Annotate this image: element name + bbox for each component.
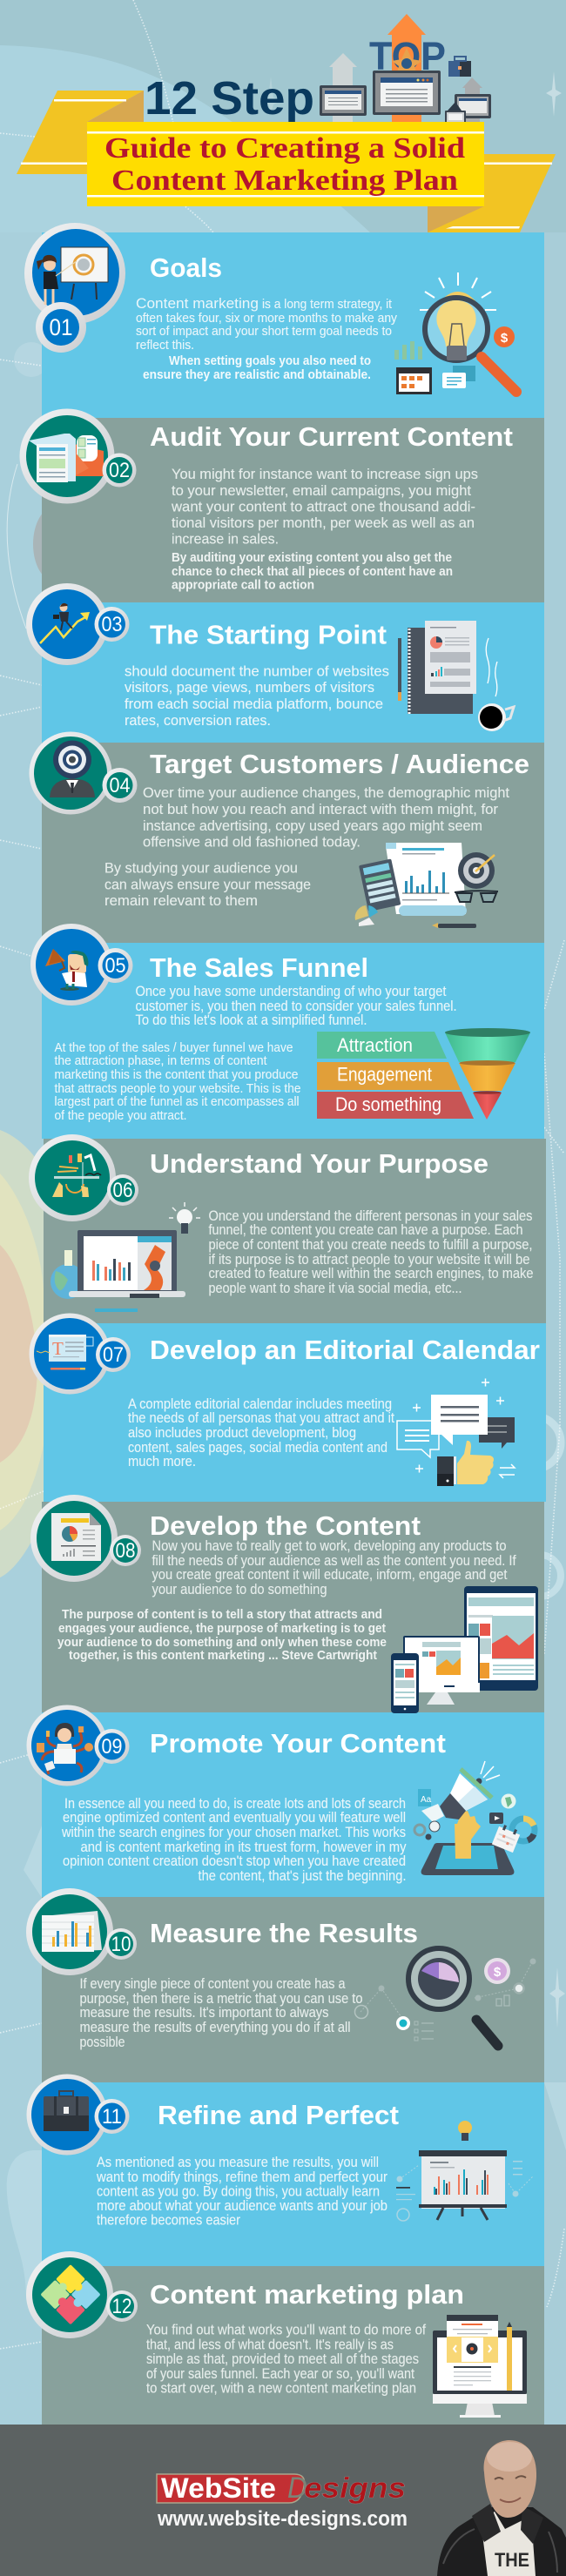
number 03: 03 (101, 613, 122, 636)
body text (104, 785, 509, 909)
number 12: 12 (111, 2295, 132, 2318)
heading: The Sales Funnel (150, 952, 368, 983)
icon: monitor with web page (433, 2315, 527, 2418)
body text: you create great content it will educate, inform, engage and get (152, 1567, 508, 1583)
body text: increase in sales. (172, 531, 279, 547)
body text: When setting goals you also need to (169, 354, 371, 368)
funnel: engagement (317, 1060, 515, 1091)
heading: Understand Your Purpose (150, 1148, 489, 1179)
body text: You find out what works you'll want to do more of (146, 2323, 426, 2338)
body text: sort of impact and your short term goal needs to (136, 325, 392, 339)
body text: You might for instance want to increase sign ups (172, 467, 478, 482)
body text: purpose, then there is a metric that you can use to (80, 1991, 362, 2007)
body text: that, and less of what doesn't. It's really is as (146, 2337, 394, 2352)
body text: more about what your audience wants and your job (97, 2198, 387, 2214)
body text: the needs of all personas that you attract and it (128, 1410, 394, 1426)
panel 03: The Starting Point (125, 620, 514, 731)
funnel: attraction: Attraction (337, 1034, 413, 1056)
body text: to your newsletter, email campaigns, you might (172, 483, 472, 499)
icon: bulb and magnifier (394, 272, 516, 394)
icon: megaphone and tablet: Aa (421, 1795, 432, 1805)
step 03 badge (26, 583, 129, 665)
body text: content as you go. By doing this, you actually learn (97, 2183, 380, 2199)
funnel: engagement: Engagement (337, 1064, 432, 1085)
logo: D (287, 2472, 307, 2505)
icon: target-headed person (30, 731, 111, 815)
step 05 badge (30, 924, 132, 1006)
panel 01: Goals (136, 252, 516, 394)
body text: reflect this. (136, 339, 194, 353)
icon: bar chart sheet (26, 1888, 113, 1975)
step 06 badge (29, 1134, 138, 1221)
logo: WebSite (161, 2472, 276, 2504)
panel 09: Promote Your Content (61, 1728, 535, 1884)
panel 06: Understand Your Purpose (51, 1148, 533, 1312)
body text: In essence all you need to do, is create lots and lots of search (64, 1796, 406, 1812)
step 01 badge (24, 223, 125, 353)
body text: instance advertising, copy used years ago might seem (143, 818, 482, 834)
number 02: 02 (109, 459, 130, 482)
heading: Develop the Content (150, 1510, 421, 1541)
body text: often takes four, six or more months to make any (136, 312, 398, 326)
body text: At the top of the sales / buyer funnel we have (54, 1041, 293, 1055)
logo: esigns (304, 2472, 406, 2504)
icon: notebook, report and coffee (398, 621, 514, 731)
heading: The Starting Point (150, 620, 387, 649)
body text: your audience to do something (152, 1582, 327, 1597)
icon: chat bubbles and thumbs up (397, 1379, 515, 1486)
body text: As mentioned as you measure the results, you will (97, 2155, 379, 2170)
panel backgrounds (42, 232, 546, 2425)
body text: visitors, page views, numbers of visitors (125, 680, 374, 696)
step 11 badge (26, 2074, 129, 2156)
number 11: 11 (102, 2105, 122, 2129)
icon: man with megaphone (30, 924, 112, 1006)
heading: Content marketing plan (150, 2279, 464, 2310)
icon: document and envelope (19, 409, 115, 503)
body text: customer is, you then need to consider your sales funnel. (136, 999, 456, 1014)
body text: engine optimized content and eventually you will feature well (63, 1810, 406, 1826)
title ribbon back tails (17, 91, 556, 232)
body text: if its purpose is to attract people to your website it will be (209, 1252, 529, 1268)
body text: remain relevant to them (104, 893, 258, 909)
number 07: 07 (103, 1343, 124, 1367)
icon: multitasking woman (26, 1705, 108, 1786)
body text: appropriate call to action (172, 578, 314, 592)
body text (54, 984, 456, 1123)
step 02 badge (19, 409, 136, 503)
heading: guide: Content Marketing Plan (111, 165, 458, 197)
icon: laptop, globe, microscope (51, 1202, 200, 1312)
panel 04: Target Customers / Audience (104, 749, 529, 928)
icon: document editor: T (52, 1338, 64, 1359)
step 08 badge (30, 1495, 141, 1582)
number 08: 08 (115, 1539, 136, 1563)
icon: briefcase (26, 2074, 108, 2156)
panel 11: Refine and Perfect (96, 2100, 533, 2229)
body text: chance to check that all pieces of content have an (172, 565, 453, 579)
body text: the content, that's just the beginning. (199, 1868, 406, 1884)
funnel: attraction (317, 1028, 530, 1062)
title graphic: arrows, windows and TOP (320, 14, 491, 129)
body text: measure the results. It's important to always (80, 2005, 329, 2021)
body text: the attraction phase, in terms of content (54, 1054, 266, 1068)
body text: largest part of the funnel as it encompasses all (54, 1095, 300, 1109)
heading: Audit Your Current Content (150, 421, 513, 452)
number 05: 05 (104, 954, 125, 978)
step 07 badge (30, 1313, 131, 1395)
body text: piece of content that you create needs to fulfill a purpose, (209, 1237, 533, 1253)
body text (136, 295, 398, 382)
number 10: 10 (111, 1933, 131, 1956)
panel 10: Measure the Results (80, 1918, 536, 2050)
body text: not but how you reach and interact with them might, for (143, 802, 499, 817)
ribbon front (87, 122, 484, 206)
body text (61, 1796, 407, 1884)
icon: report page (30, 1495, 118, 1582)
portrait (437, 2440, 566, 2576)
body text: Now you have to really get to work, developing any products to (152, 1538, 507, 1554)
step 12 badge (26, 2251, 138, 2338)
funnel: do something (317, 1091, 502, 1120)
body text: ensure they are realistic and obtainable. (143, 368, 371, 382)
step 10 badge (26, 1888, 137, 1975)
number 01 (36, 302, 86, 353)
body text: rates, conversion rates. (125, 713, 271, 729)
heading: 12 Step: 12 Step (145, 72, 314, 124)
body text: offensive and old fashioned today. (143, 834, 360, 850)
body text (128, 1396, 394, 1470)
number 09: 09 (101, 1735, 122, 1759)
body text: to start over, with a new content marketing plan (146, 2380, 416, 2396)
website url: www.website-designs.com (157, 2507, 408, 2531)
body text: A complete editorial calendar includes meeting (128, 1396, 392, 1412)
panel 05: The Sales Funnel (54, 952, 530, 1123)
body text: marketing this is the content that you produce (54, 1068, 298, 1082)
body text: is a long term strategy, it (262, 298, 392, 312)
main title (87, 72, 484, 206)
body text: that attracts people to your website. This is the (54, 1082, 301, 1096)
icon: responsive devices (391, 1586, 538, 1713)
icon: megaphone and tablet (414, 1761, 535, 1875)
body text: measure the results of everything you do if at all (80, 2020, 350, 2035)
icon: rising arrow and runner (26, 583, 108, 665)
icon: report, calculator, target, glasses (355, 843, 498, 928)
body text: tional visitors per month, per week as well as an (172, 515, 475, 531)
body text: By auditing your existing content you also get the (172, 551, 452, 565)
body text: content, sales pages, social media content and (128, 1440, 387, 1456)
portrait: THE (495, 2549, 529, 2571)
icon: puzzle pieces (26, 2251, 113, 2338)
body text: created to feature well within the search engines, to make (209, 1266, 533, 1281)
body text: funnel, the content you create can have a purpose. Each (209, 1222, 522, 1238)
panel 07: Develop an Editorial Calendar (128, 1335, 540, 1486)
body text (96, 2155, 388, 2229)
body text: together, is this content marketing ... Steve Cartwright (69, 1649, 377, 1663)
heading: Measure the Results (150, 1918, 418, 1948)
panel 08: Develop the Content (57, 1510, 538, 1713)
step 04 badge (30, 731, 138, 815)
body text: want your content to attract one thousand addi- (171, 500, 475, 515)
title graphic: arrows, windows and TOP: TOP (369, 34, 446, 78)
body text (171, 467, 478, 592)
body text: within the search engines for your chosen market. This works (61, 1825, 406, 1840)
body text: people want to share it via social media, etc... (209, 1281, 462, 1296)
body text: of your sales funnel. Each year or so, you'll want (146, 2366, 414, 2382)
heading: guide (104, 132, 465, 197)
body text: The purpose of content is to tell a story that attracts and (62, 1608, 382, 1622)
step 09 badge (26, 1705, 129, 1786)
icon: presenter with board (24, 223, 125, 324)
icon: magnifier with pie chart (355, 1948, 536, 2046)
heading: Target Customers / Audience (150, 749, 529, 779)
body text: engages your audience, the purpose of marketing is to get (58, 1622, 386, 1636)
panel 02: Audit Your Current Content (150, 421, 513, 592)
body text: of the people you attract. (54, 1109, 186, 1123)
funnel: do something: Do something (335, 1093, 441, 1115)
body text: To do this let's look at a simplified funnel. (136, 1012, 367, 1028)
heading: Goals (150, 252, 222, 283)
icon: bulb and magnifier: $ (501, 331, 509, 346)
body text: Once you understand the different personas in your sales (209, 1208, 533, 1224)
number 04: 04 (110, 774, 131, 797)
body text: Over time your audience changes, the demographic might (143, 785, 509, 801)
icon: magnifier with pie chart: $ (494, 1965, 502, 1980)
body text: Content marketing (136, 295, 259, 312)
body text (57, 1538, 516, 1663)
body text: much more. (128, 1454, 196, 1470)
body text (146, 2323, 426, 2396)
body text: want to modify things, refine them and perfect your (96, 2169, 388, 2185)
number 06: 06 (113, 1179, 132, 1202)
body text (80, 1976, 362, 2050)
heading: guide: Guide to Creating a Solid (104, 132, 465, 165)
body text (209, 1208, 533, 1296)
body text: By studying your audience you (104, 861, 298, 877)
heading: Develop an Editorial Calendar (150, 1335, 540, 1365)
funnel chart (317, 1028, 530, 1120)
body text: If every single piece of content you create has a (80, 1976, 345, 1992)
icon: design tools (29, 1134, 116, 1221)
footer (0, 2425, 566, 2576)
panel 12: Content marketing plan (146, 2279, 527, 2418)
number 01: 01 (49, 314, 73, 340)
arrow: orange up (387, 14, 426, 129)
body text: should document the number of websites (125, 663, 389, 679)
logo (157, 2472, 406, 2505)
body text: from each social media platform, bounce (125, 696, 383, 712)
body text: therefore becomes easier (97, 2213, 241, 2229)
heading: Promote Your Content (150, 1728, 446, 1759)
body text: can always ensure your message (104, 877, 311, 892)
body text: simple as that, provided to meet all of the stages (146, 2351, 419, 2367)
icon: presentation board (396, 2121, 533, 2221)
heading: Refine and Perfect (158, 2100, 399, 2130)
body text: also includes product development, blog (128, 1425, 356, 1441)
body text: possible (80, 2035, 125, 2050)
body text: fill the needs of your audience as well as the content you need. If (152, 1553, 516, 1569)
body text (125, 663, 389, 729)
body text: and is content marketing in its truest form, however in my (80, 1840, 407, 1855)
body text: your audience to do something and only when these come (57, 1636, 387, 1650)
body text: Once you have some understanding of who your target (136, 984, 447, 999)
body text: opinion content creation doesn't stop when you have created (63, 1853, 406, 1869)
